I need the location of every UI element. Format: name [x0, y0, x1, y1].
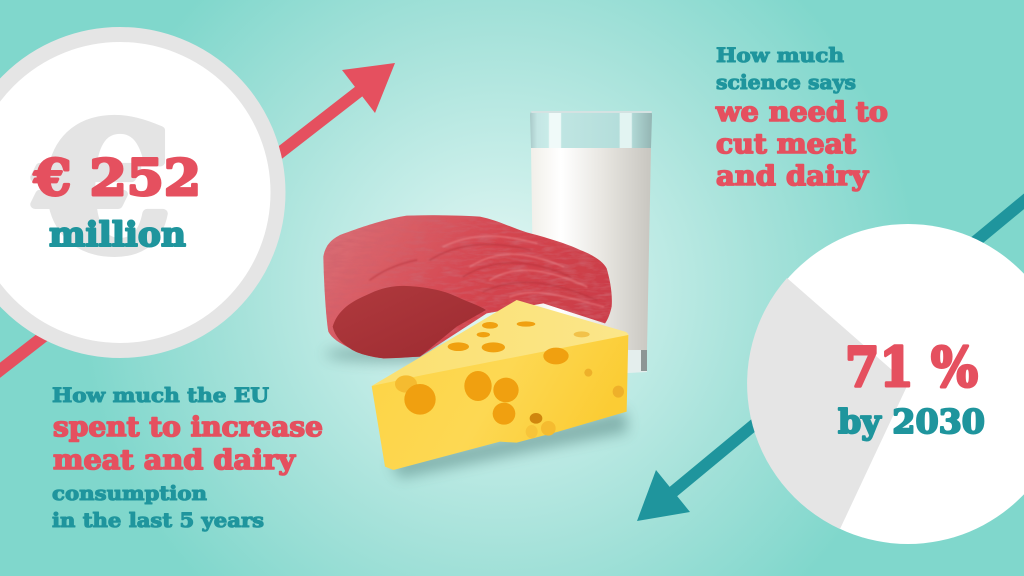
panel: reduction pie circle: [747, 224, 1024, 544]
target year: by 2030: [838, 402, 985, 441]
text block: EU spending: consumption: [52, 481, 207, 505]
text block: EU spending: meat and dairy: [53, 445, 296, 476]
percentage: 71 %: [845, 335, 978, 399]
text block: EU spending: How much the EU: [52, 383, 269, 407]
illustration: milk, meat and cheese: [323, 111, 652, 478]
glass of milk: [530, 111, 652, 373]
food shadows: [325, 346, 628, 478]
meat grain: [370, 236, 603, 307]
arrow: falling teal: [637, 193, 1024, 521]
amount: € 252: [33, 148, 201, 207]
text block: EU spending: in the last 5 years: [52, 508, 264, 532]
text block: EU spending: [52, 383, 323, 532]
text block: science says: [715, 43, 888, 192]
pie base: [748, 224, 1024, 544]
text block: science says: and dairy: [716, 161, 869, 192]
panel: EU spending circle: [0, 34, 278, 350]
large euro watermark: €: [35, 85, 172, 292]
circle ring: [0, 34, 278, 350]
pie slice 29 percent: [747, 278, 908, 529]
text block: EU spending: spent to increase: [53, 412, 323, 443]
text block: science says: How much: [716, 43, 844, 67]
text block: science says: science says: [716, 70, 856, 94]
unit: million: [49, 215, 186, 255]
text block: science says: we need to: [715, 97, 888, 128]
cheese wedge: [372, 300, 629, 470]
text block: science says: cut meat: [716, 129, 857, 160]
arrow: rising red: [0, 63, 395, 378]
meat: [323, 215, 612, 358]
